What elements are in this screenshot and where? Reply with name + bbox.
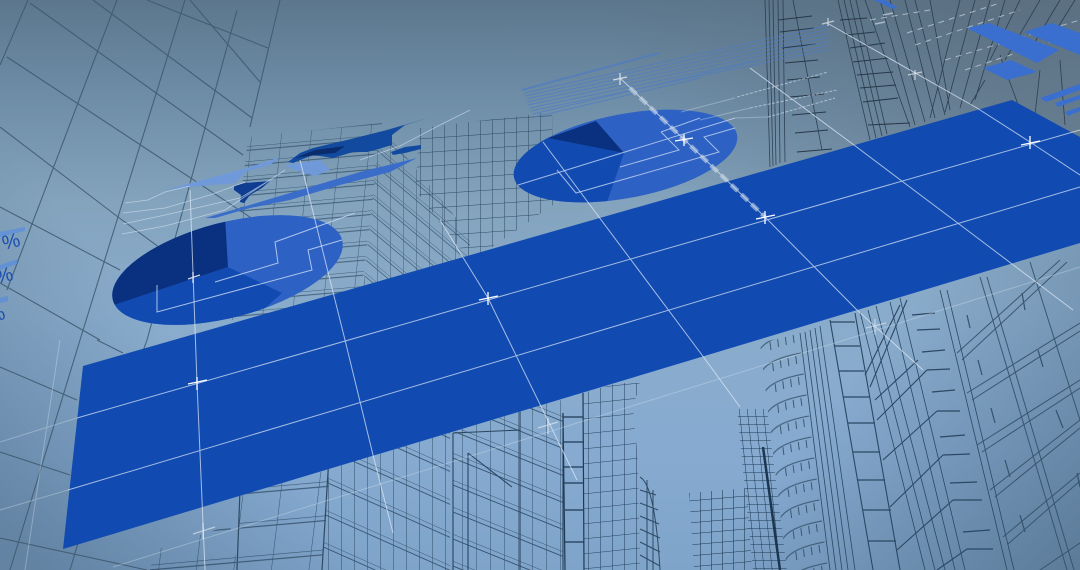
pie left: overlay lines — [157, 213, 355, 312]
small block far left — [150, 525, 238, 570]
pie left: mid segment — [114, 267, 282, 325]
lower left block: left face — [238, 470, 330, 570]
rung column floors — [830, 322, 896, 541]
building: central lattice tower — [227, 112, 553, 320]
pie right: large segment — [514, 138, 624, 202]
percent bars — [0, 227, 25, 303]
percent labels: % — [0, 229, 23, 255]
second rung column — [912, 313, 993, 549]
data label lines beside map — [122, 110, 470, 234]
pie chart: right — [514, 110, 738, 202]
right block: diagonal floors — [957, 260, 1080, 570]
map: light landmass — [285, 160, 330, 176]
diagonals — [865, 300, 967, 570]
world map — [165, 117, 431, 218]
building: tall tower centre — [563, 383, 640, 570]
pie left: dark segment — [112, 222, 228, 305]
pie right: overlay lines — [518, 118, 735, 193]
right block: ticks — [967, 293, 1080, 532]
skyscrapers: vertical bundles — [765, 0, 1075, 167]
pie chart: left — [112, 212, 355, 325]
tower: side face — [360, 125, 470, 320]
percent labels — [0, 227, 25, 328]
wireframe wall: upper left building — [0, 0, 300, 570]
map: southern continent — [234, 181, 270, 203]
map: light continents — [165, 157, 280, 190]
crosshair markers — [188, 18, 1040, 539]
tower: far grid — [415, 112, 553, 262]
rung column edges — [830, 313, 900, 570]
map: shadow band — [205, 158, 417, 218]
building: tall narrow tower — [737, 409, 787, 570]
map: Eurasia — [288, 117, 431, 163]
tower: front face — [227, 123, 382, 320]
building: lower right perspective block — [957, 260, 1080, 570]
building: left of centre, lower — [150, 425, 450, 570]
bundled verticals — [800, 290, 1014, 570]
data stripes panel — [522, 25, 830, 117]
small text lines upper right — [681, 3, 1080, 120]
large blue plane — [63, 100, 1080, 549]
map: dark core — [295, 146, 345, 158]
building: rung column and bundled lines — [800, 290, 1014, 570]
right block: verticals — [980, 262, 1080, 570]
map: island — [391, 145, 421, 155]
building: low cube tower — [689, 488, 752, 570]
lower left block: right face — [322, 425, 450, 570]
building: small curved tower — [640, 477, 660, 570]
building cluster: top right skyscrapers — [765, 0, 1075, 167]
lower left block: edge — [237, 440, 330, 570]
top right floating blue slabs — [874, 0, 1080, 116]
skyscrapers: floor rungs right — [840, 18, 910, 125]
pie right: dark segment — [548, 121, 624, 153]
dashed pointer line — [630, 88, 765, 217]
building: curved tower — [760, 333, 830, 570]
skyscrapers: floor rungs left — [778, 16, 832, 152]
faint extensions over sky — [0, 267, 1080, 570]
building: centre block — [453, 400, 563, 570]
